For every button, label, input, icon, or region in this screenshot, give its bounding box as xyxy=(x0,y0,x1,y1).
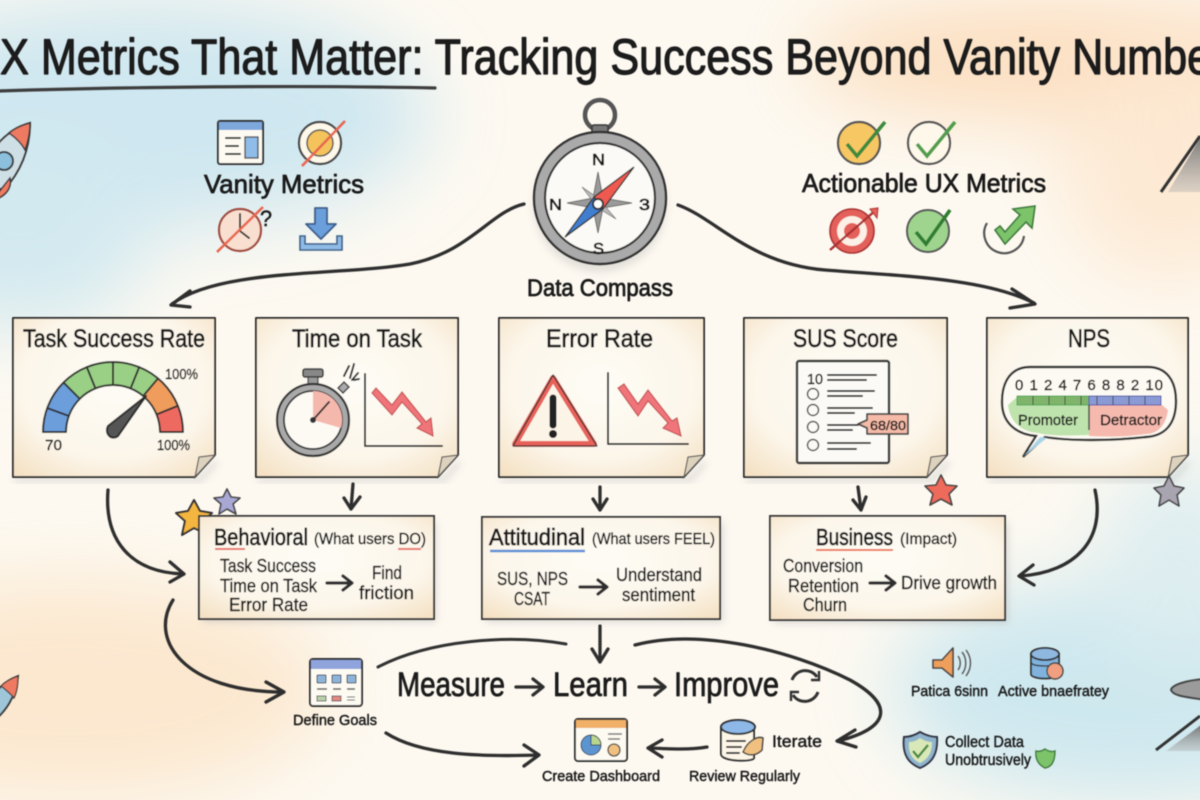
icon: database with notes xyxy=(721,720,763,761)
arrow: define goals to dashboard xyxy=(386,733,539,766)
metric list: Conversion xyxy=(783,556,863,576)
heading: measure learn improve: Measure xyxy=(397,666,505,704)
text: collect data unobtrusively xyxy=(945,734,1031,769)
metric list xyxy=(497,569,568,609)
text: collect data unobtrusively: Unobtrusively xyxy=(945,752,1031,769)
heading: Time on Task xyxy=(292,325,422,353)
heading: NPS xyxy=(1068,325,1110,353)
heading: Error Rate xyxy=(546,325,653,353)
label: iterate: Iterate xyxy=(772,732,822,751)
compass: S xyxy=(593,241,604,258)
arrow: compass to left xyxy=(171,204,524,307)
arrow: learn around to iterate xyxy=(635,639,881,747)
metric list: Churn xyxy=(803,595,847,615)
heading: measure learn improve: Improve xyxy=(674,666,779,704)
icon: yellow check xyxy=(838,122,885,164)
metric list: Retention xyxy=(788,576,859,596)
star: grey xyxy=(1154,476,1184,506)
outcome: Understand xyxy=(616,565,702,585)
panel: time on task xyxy=(256,318,459,480)
decoration: peak top right xyxy=(1161,130,1200,192)
icon: crossed clock: ? xyxy=(260,206,272,231)
text: collect data unobtrusively: Collect Data xyxy=(945,734,1024,751)
panel: error rate xyxy=(499,318,705,480)
icon: warning triangle xyxy=(513,375,597,446)
label: Define Goals xyxy=(293,712,377,729)
metric list: SUS, NPS xyxy=(497,569,568,589)
arrow: behavioral to define goals xyxy=(165,600,284,702)
panel: sus score xyxy=(744,318,948,480)
methods group xyxy=(904,648,1109,769)
line chart: falling trend xyxy=(365,374,442,446)
vanity metrics group xyxy=(204,121,364,252)
icon: speaker xyxy=(933,648,970,677)
icon: growth arrow xyxy=(984,206,1035,253)
outcome: Find xyxy=(372,563,402,583)
arrow: time on task down xyxy=(344,484,360,509)
heading: Business xyxy=(816,524,893,550)
panel: nps xyxy=(987,318,1188,480)
nps speech bubble xyxy=(1002,367,1176,457)
arrow xyxy=(327,576,352,590)
metric list xyxy=(220,556,318,615)
icon: goals dashboard xyxy=(310,659,362,706)
arrow: sus score down xyxy=(853,487,866,510)
icon: refresh xyxy=(791,671,819,701)
gauge chart xyxy=(43,362,198,454)
heading: measure learn improve: Learn xyxy=(553,666,628,704)
label: vanity metrics: Vanity Metrics xyxy=(204,169,364,199)
icon: crossed clock xyxy=(217,206,272,252)
decoration: saucer and peak bottom right xyxy=(1156,679,1200,751)
arrow: compass to right xyxy=(678,205,1035,308)
panel: attitudinal xyxy=(482,517,723,622)
heading: Attitudinal xyxy=(489,524,585,550)
label: actionable ux metrics: Actionable UX Metrics xyxy=(802,168,1046,198)
icon: stopwatch xyxy=(277,364,359,456)
outcome: sentiment xyxy=(622,585,695,605)
nps speech bubble: 0 1 2 4 7 6 8 8 2 10 xyxy=(1015,377,1163,394)
metric list xyxy=(783,556,863,615)
step: create dashboard xyxy=(542,719,660,785)
arrow: review to dashboard xyxy=(648,740,707,757)
gauge chart: 70 xyxy=(45,437,62,454)
arc: define goals toward learn xyxy=(378,639,566,667)
arrow xyxy=(580,580,607,594)
label: Create Dashboard xyxy=(542,768,660,785)
star: purple xyxy=(214,489,240,514)
nps speech bubble: Detractor xyxy=(1100,412,1162,429)
panel: task success rate xyxy=(13,318,216,480)
icon: database xyxy=(1031,648,1063,679)
label: active: Active bnaefratey xyxy=(998,683,1109,700)
icon: outlined check xyxy=(908,122,955,164)
metric list: Time on Task xyxy=(220,576,318,596)
panel: business: (Impact) xyxy=(900,531,957,548)
panel: business xyxy=(770,516,1008,623)
decoration: rocket top left xyxy=(0,123,30,200)
label: passive: Patica 6sinn xyxy=(911,683,988,700)
icon: small shield xyxy=(1036,749,1055,768)
icon: dashboard xyxy=(575,719,627,761)
line chart: falling trend xyxy=(608,373,688,444)
decoration: rocket bottom left xyxy=(0,676,18,722)
nps speech bubble: Promoter xyxy=(1018,412,1078,429)
outcome xyxy=(359,563,414,603)
arrow: task success to behavioral xyxy=(108,490,184,582)
icon: crossed target xyxy=(299,121,345,166)
panel: behavioral xyxy=(199,516,436,622)
star: gold xyxy=(176,500,212,535)
step: review regularly xyxy=(689,720,822,785)
compass: N xyxy=(549,197,562,214)
panel: behavioral: (What users DO) xyxy=(314,531,426,548)
icon: survey sheet with score: 10 xyxy=(807,371,823,388)
icon: target xyxy=(830,208,878,253)
icon: green check xyxy=(907,210,950,252)
label: review regularly: Review Regularly xyxy=(689,768,800,785)
outcome xyxy=(616,565,702,605)
metric list: Error Rate xyxy=(229,595,308,615)
arrow: nps to business xyxy=(1019,490,1097,585)
compass: 3 xyxy=(639,197,650,214)
star: red xyxy=(925,475,957,505)
heading: Behavioral xyxy=(214,524,308,550)
arrow: error rate down xyxy=(593,487,607,510)
arrow xyxy=(870,576,895,590)
icon: survey sheet with score xyxy=(797,361,908,463)
panel: attitudinal: (What users FEEL) xyxy=(592,531,715,548)
icon: survey sheet with score: 68/80 xyxy=(870,418,906,433)
heading: Task Success Rate xyxy=(23,325,205,353)
outcome: Drive growth xyxy=(901,573,997,593)
gauge chart: 100% xyxy=(165,366,198,383)
actionable metrics group xyxy=(802,122,1046,253)
icon: shield xyxy=(904,732,937,768)
icon: download xyxy=(300,208,342,250)
icon: browser window xyxy=(218,121,263,164)
metric list: CSAT xyxy=(514,589,550,609)
heading: SUS Score xyxy=(793,325,898,353)
heading: measure learn improve xyxy=(397,666,819,704)
arrow: attitudinal down to loop xyxy=(592,626,608,662)
step: define goals xyxy=(293,659,377,729)
gauge chart: 100% xyxy=(157,437,190,454)
metric list: Task Success xyxy=(220,556,316,576)
compass xyxy=(534,100,666,272)
outcome: friction xyxy=(359,583,414,603)
compass: N xyxy=(592,152,605,169)
label: data compass: Data Compass xyxy=(527,275,673,302)
